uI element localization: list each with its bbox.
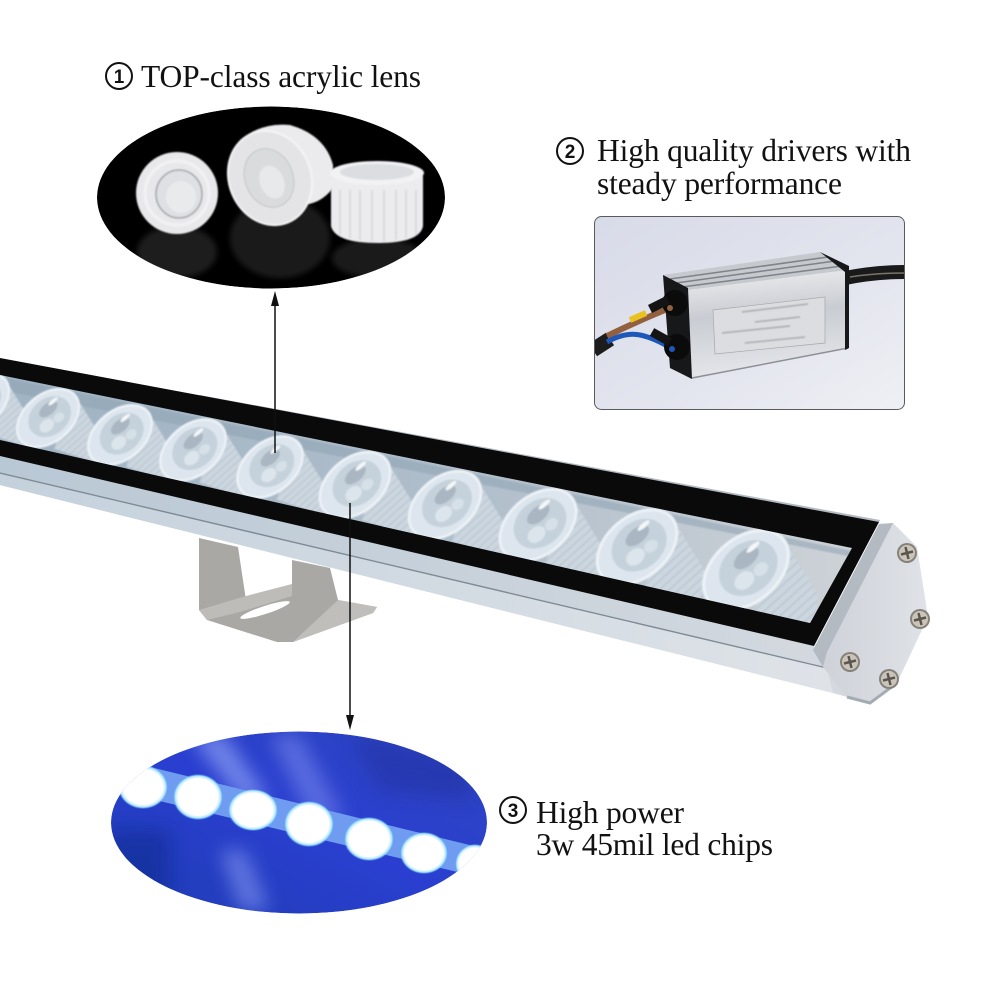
lens 9 xyxy=(702,528,817,623)
left lens xyxy=(136,152,218,234)
row of acrylic lenses xyxy=(0,360,852,632)
black end caps xyxy=(650,252,849,379)
inner window xyxy=(0,375,852,623)
lens 3 xyxy=(158,418,246,496)
heading 3: LED chips: High power xyxy=(536,795,684,830)
LED 6 xyxy=(456,844,481,872)
heading 3: LED chips xyxy=(500,795,773,862)
right lens xyxy=(330,161,424,243)
LED 4 xyxy=(344,817,394,861)
heading 2: drivers xyxy=(557,133,911,201)
screws xyxy=(840,543,930,689)
lens 2 xyxy=(86,403,169,478)
aluminium body rail xyxy=(0,456,847,697)
mounting bracket xyxy=(199,538,377,642)
lens 0 xyxy=(0,375,26,446)
LED 3 xyxy=(284,801,334,847)
power cable xyxy=(845,272,905,278)
heading 3: LED chips: 3 xyxy=(508,801,518,822)
end cap xyxy=(813,523,930,703)
lens 7 xyxy=(498,487,600,576)
heading 2: drivers: 2 xyxy=(565,142,575,163)
lens 5 xyxy=(318,450,412,534)
photo: LED chips on blue oval xyxy=(100,732,495,914)
photo: LED driver xyxy=(593,216,905,410)
light streaks xyxy=(110,735,470,910)
middle lens xyxy=(226,124,334,228)
LED strip xyxy=(122,767,480,872)
LED 2 xyxy=(228,789,278,831)
heading 2: drivers: steady performance xyxy=(597,166,842,201)
LED 0 xyxy=(118,765,168,809)
heading 3: LED chips: 3w 45mil led chips xyxy=(536,827,773,862)
LED bar fixture xyxy=(0,358,930,703)
black gasket frame xyxy=(0,358,879,646)
heading 1: acrylic lens: TOP-class acrylic lens xyxy=(141,59,421,94)
LED 5 xyxy=(400,832,448,874)
top edge of housing xyxy=(200,395,880,524)
photo: acrylic lenses on black oval xyxy=(97,106,445,288)
heading 1: acrylic lens: 1 xyxy=(114,67,125,88)
spec label xyxy=(713,297,825,354)
arrow to LED chips photo xyxy=(346,503,354,730)
lens 8 xyxy=(595,508,704,599)
reflections xyxy=(137,198,424,278)
heading 2: drivers: High quality drivers with xyxy=(597,133,911,168)
lens 6 xyxy=(407,469,504,554)
driver top face xyxy=(663,252,848,290)
arrow to lens photo xyxy=(271,291,279,453)
driver front face xyxy=(688,271,845,369)
lens 4 xyxy=(236,434,323,513)
LED 1 xyxy=(173,774,223,820)
brown, yellow and blue wires xyxy=(593,308,674,350)
lens 1 xyxy=(16,387,94,462)
